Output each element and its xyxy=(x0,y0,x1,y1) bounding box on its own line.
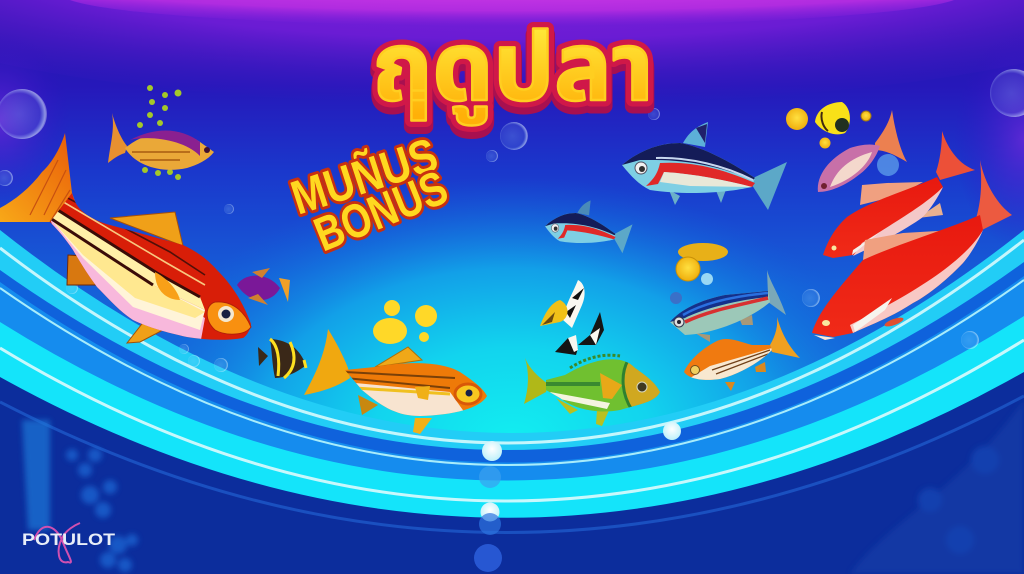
fish: red upper xyxy=(823,131,975,258)
fish: big orange striped xyxy=(0,133,251,345)
bonus text: MUÑUS xyxy=(284,127,444,225)
fish: orange right xyxy=(684,317,800,391)
seaweed silhouettes xyxy=(22,400,1024,574)
fish: black and yellow angelfish xyxy=(258,339,306,378)
fish: red lower xyxy=(812,160,1012,340)
title: ฤดูปลา xyxy=(372,5,654,150)
coins and yellow fish top right xyxy=(786,102,871,148)
bubbles xyxy=(0,69,1024,372)
logo xyxy=(22,523,116,563)
fish: purple and gold top-left xyxy=(108,85,214,180)
logo: POTULOT xyxy=(22,530,116,549)
fish: neon xyxy=(670,270,786,342)
coins: center-left cluster xyxy=(373,300,437,344)
fish: small tuna xyxy=(545,200,633,253)
title: ฤดูปลา xyxy=(372,0,654,144)
coins: upper right of center xyxy=(676,243,728,281)
fish: pink xyxy=(818,110,907,192)
fish: orange striped center-left xyxy=(304,329,487,434)
fish: black and white center xyxy=(555,280,604,355)
bonus text xyxy=(284,127,455,262)
pearls on the waves xyxy=(474,422,681,572)
title: ฤดูปลา xyxy=(372,0,654,144)
bonus text: BONUS xyxy=(307,161,455,262)
fish: green xyxy=(524,355,668,426)
fish: small yellow xyxy=(540,300,568,326)
fish: large tuna xyxy=(622,122,787,210)
curved water bands xyxy=(0,230,1024,574)
fish: small purple xyxy=(237,268,290,305)
